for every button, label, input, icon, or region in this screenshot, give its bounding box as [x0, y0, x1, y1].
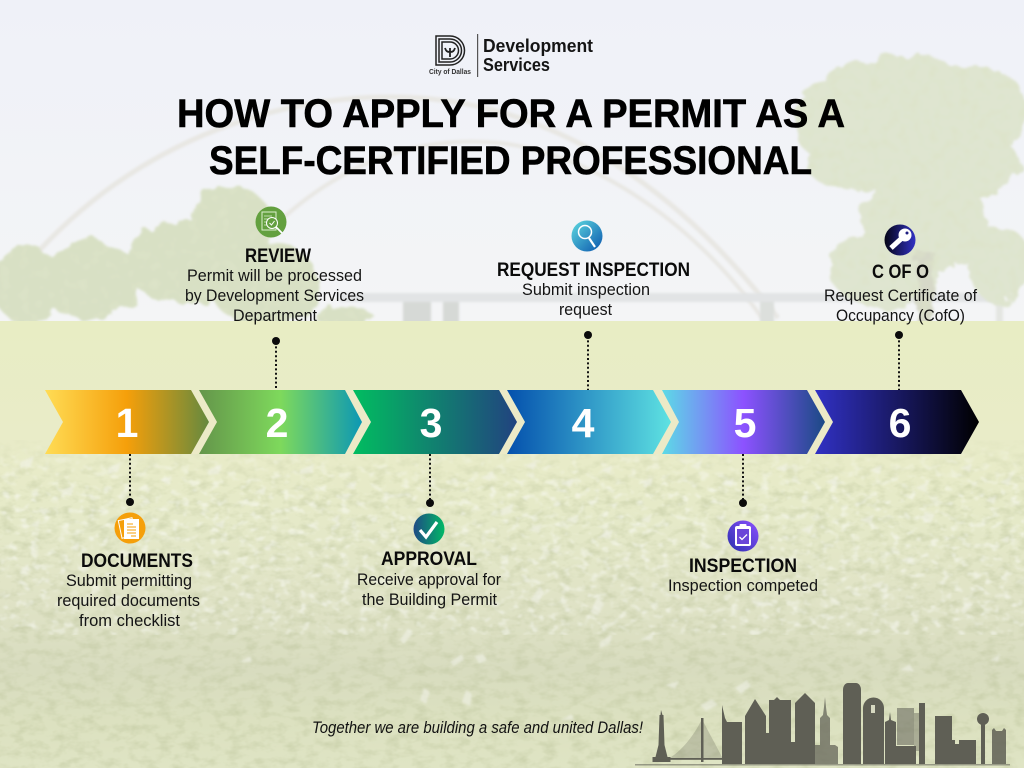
step: approval: the Building Permit	[362, 591, 497, 609]
dotted connectors	[126, 331, 903, 507]
logo: City of Dallas Development Services: Services	[483, 55, 550, 75]
bridge arches	[38, 97, 778, 318]
title: HOW TO APPLY FOR A PERMIT AS A	[177, 92, 845, 136]
icon: key	[884, 224, 916, 256]
logo: City of Dallas Development Services: City of Dallas	[429, 69, 471, 76]
arrow step 6: 6	[889, 400, 911, 446]
arrow step 1: 1	[116, 400, 138, 446]
step: request inspection: request	[559, 301, 612, 319]
tagline: Together we are building a safe and united Dallas!	[312, 719, 643, 737]
step: request inspection	[497, 220, 690, 319]
logo: City of Dallas Development Services: Development	[483, 36, 593, 56]
step: documents	[57, 512, 200, 630]
meadow flowers	[20, 456, 1012, 720]
icon: documents	[114, 512, 146, 544]
step: certificate of occupancy: Request Certificate of	[824, 287, 977, 305]
title	[177, 92, 845, 183]
step: request inspection: REQUEST INSPECTION	[497, 259, 690, 281]
step: documents: from checklist	[79, 612, 180, 630]
step: approval: APPROVAL	[381, 548, 477, 570]
icon: magnifying glass	[572, 220, 602, 252]
title: SELF-CERTIFIED PROFESSIONAL	[209, 139, 812, 183]
logo: City of Dallas Development Services	[429, 34, 593, 77]
arrow step 5: 5	[734, 400, 756, 446]
arrow step 3	[353, 390, 517, 454]
arrow step 5	[662, 390, 825, 454]
step: review: Permit will be processed	[187, 267, 362, 285]
step: review: Department	[233, 307, 317, 325]
bridge deck	[340, 240, 1003, 330]
step: review: REVIEW	[245, 245, 311, 267]
arrow step 2	[199, 390, 362, 454]
arrow step 3: 3	[420, 400, 442, 446]
step: inspection: Inspection competed	[668, 577, 818, 595]
arrow step 4: 4	[572, 400, 595, 446]
step: certificate of occupancy: Occupancy (CofO)	[836, 307, 965, 325]
step: inspection	[668, 520, 818, 595]
step: documents: DOCUMENTS	[81, 550, 193, 572]
step: documents: required documents	[57, 592, 200, 610]
step: approval: Receive approval for	[357, 571, 501, 589]
arrow step 2: 2	[266, 400, 288, 446]
step: certificate of occupancy	[824, 224, 977, 325]
downtown towers	[722, 705, 742, 764]
arrow step 1	[45, 390, 209, 454]
step: request inspection: Submit inspection	[522, 281, 650, 299]
icon: magnified document	[256, 206, 286, 238]
arrow step 4	[507, 390, 671, 454]
icon: check mark	[414, 514, 444, 544]
monument	[652, 710, 670, 762]
step: review	[185, 206, 364, 325]
step: documents: Submit permitting	[66, 572, 192, 590]
step: approval	[357, 514, 501, 609]
timeline band behind arrows	[190, 390, 840, 454]
trees	[0, 56, 1024, 330]
step: inspection: INSPECTION	[689, 555, 797, 577]
arrow step 6	[815, 390, 979, 454]
icon: stylised D	[436, 36, 465, 65]
step: review: by Development Services	[185, 287, 364, 305]
Dallas skyline silhouette	[635, 683, 1010, 766]
suspension bridge	[668, 721, 723, 759]
icon: clipboard	[728, 520, 758, 552]
step: certificate of occupancy: C OF O	[872, 261, 929, 283]
